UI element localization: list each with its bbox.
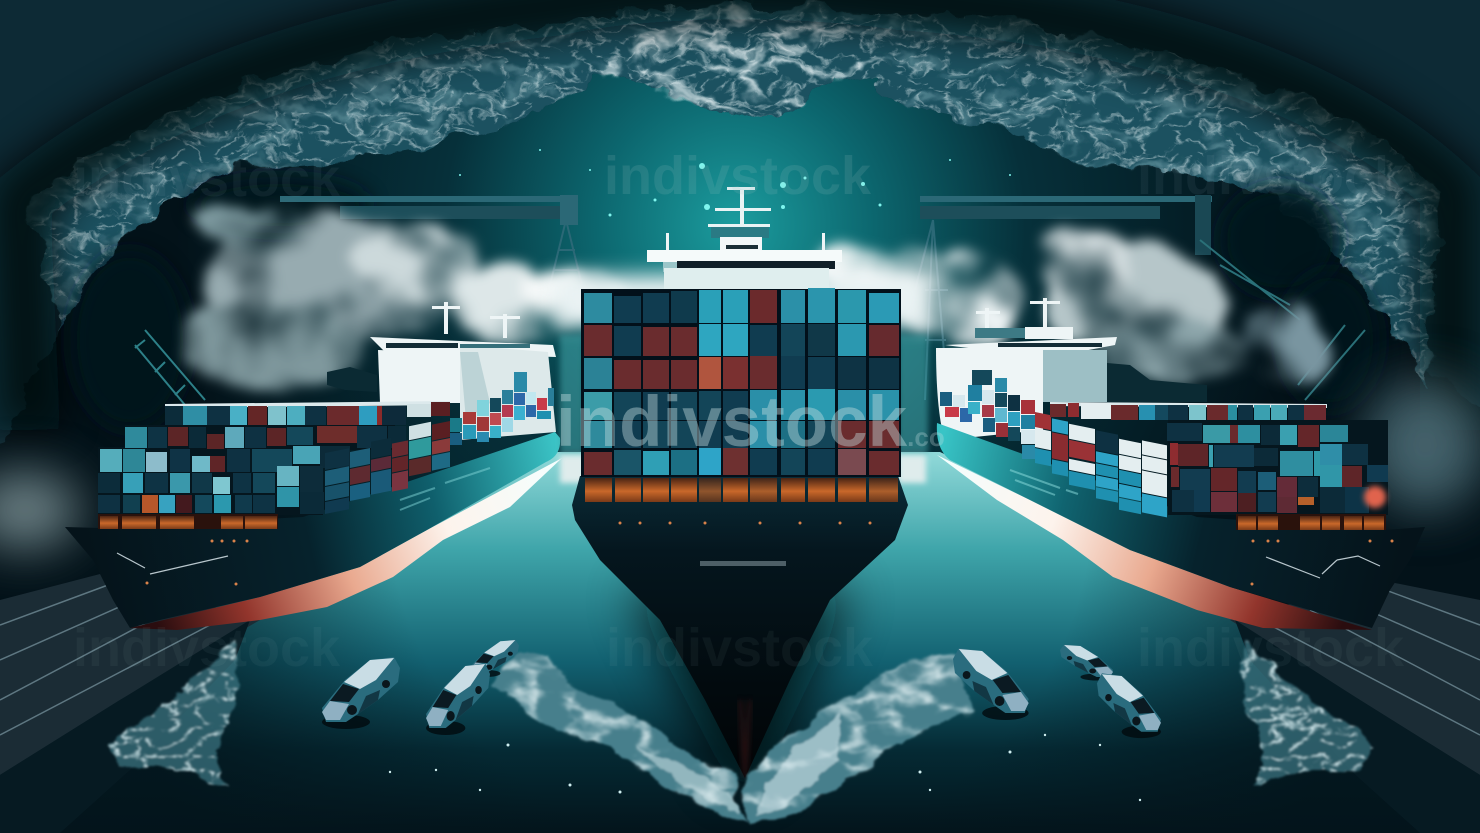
right ship [936, 298, 1425, 628]
central ship hull markings [618, 522, 872, 778]
left ship dark exhaust shape [327, 367, 377, 392]
left ship container stacks at bow [98, 401, 450, 515]
left harbour crane [135, 195, 582, 405]
car: left middle front [426, 663, 490, 735]
left ship orange lower tier [98, 514, 278, 529]
central ship [572, 187, 908, 778]
right ship container stacks at bow [1050, 402, 1388, 515]
watermark: indivstock top row: indivstock [1137, 146, 1405, 206]
car: right outer rear [1060, 644, 1113, 680]
side mist [0, 380, 1480, 548]
right shore splash [1240, 640, 1375, 785]
right ship hull markings [1010, 470, 1394, 586]
sea water [0, 452, 1480, 833]
right ship dark exhaust shape [1107, 363, 1207, 402]
left ship hull markings [117, 468, 490, 586]
clouds [180, 203, 1335, 390]
sea spray droplets [389, 734, 1141, 801]
car: right outer front [1097, 673, 1161, 738]
left ship superstructure [370, 302, 556, 440]
watermark: indivstock bottom row [73, 618, 1405, 678]
central ship container wall [581, 288, 901, 477]
right ship orange lower tier [1236, 514, 1386, 530]
central ship hull [572, 476, 908, 778]
right quay road [1230, 580, 1480, 833]
right ship hull [937, 423, 1425, 628]
right ship wake foam [937, 455, 1372, 630]
left ship hull [65, 432, 560, 628]
right ship receding container columns [1035, 412, 1167, 519]
left bow wave [491, 653, 749, 823]
left ship [65, 302, 560, 628]
car: left middle rear [471, 640, 519, 677]
watermark: indivstock bottom row: indivstock [606, 618, 874, 678]
left quay road [0, 574, 260, 833]
watermark: indivstock top row [73, 146, 1405, 208]
right harbour crane [915, 195, 1365, 400]
dark shadow of central ship on water [630, 590, 850, 785]
watermark: indivstock top row: indivstock [604, 146, 872, 206]
watermark: indivstock top row: indivstock [73, 148, 341, 208]
left ship wake foam [130, 458, 562, 630]
left shore splash [105, 640, 240, 785]
right ship red warning light [1364, 486, 1386, 508]
dark cave interior at both sides [70, 177, 1380, 430]
stars and glowing lights [459, 149, 1011, 216]
watermark: indivstock bottom row: indivstock [73, 618, 341, 678]
right ship superstructure [936, 298, 1117, 440]
watermark: indivstock bottom row: indivstock [1137, 618, 1405, 678]
watermark: indivstock centre: indivstock.co [556, 383, 945, 462]
car: left front [322, 657, 400, 729]
left ship stern jumble of containers [450, 372, 554, 445]
left ship receding container columns [325, 418, 450, 514]
central ship superstructure [647, 187, 842, 292]
car: right inner [953, 648, 1029, 720]
right bow wave [740, 652, 973, 825]
right ship stern jumble of containers [940, 370, 1035, 459]
storm wave arch across the top [0, 0, 1480, 450]
dark outer rim fading the arch into the corners [20, 0, 1450, 430]
central ship orange lower tier [585, 478, 898, 502]
white glow behind central ship [555, 275, 928, 483]
